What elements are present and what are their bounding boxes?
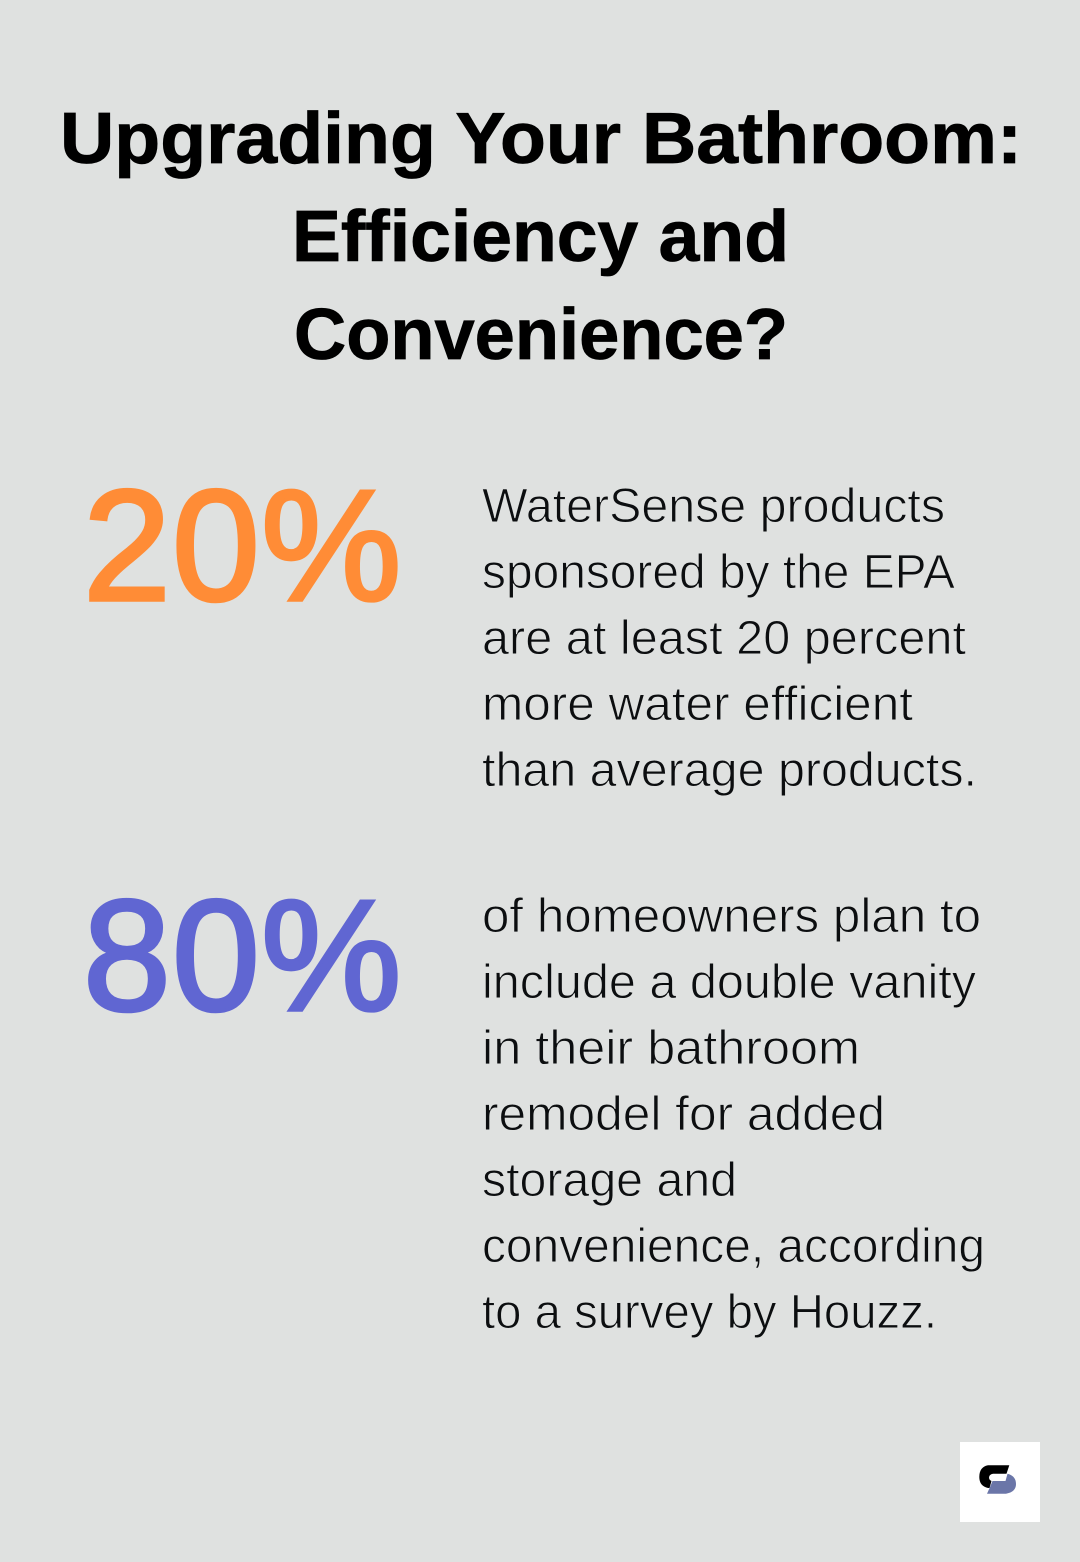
text block: homeowners double vanity: in their bathroom — [482, 1022, 860, 1075]
text block: WaterSense products — [482, 480, 977, 797]
text block: homeowners double vanity: remodel for added — [482, 1088, 885, 1141]
text block: homeowners double vanity: include a double vanity — [482, 956, 976, 1009]
text block: WaterSense products: than average products. — [482, 744, 977, 797]
text block: WaterSense products: sponsored by the EPA — [482, 546, 955, 599]
stat: 80%: 80% — [83, 868, 402, 1044]
title: Upgrading Your Bathroom: — [60, 99, 1022, 179]
title: Convenience? — [294, 295, 788, 375]
stat: 20%: 20% — [83, 458, 402, 634]
logo badge — [960, 1442, 1040, 1522]
text block: homeowners double vanity: to a survey by Houzz. — [482, 1286, 937, 1339]
text block: WaterSense products: are at least 20 percent — [482, 612, 966, 665]
text block: homeowners double vanity: of homeowners plan to — [482, 890, 981, 943]
title: Efficiency and — [292, 197, 789, 277]
text block: homeowners double vanity: storage and — [482, 1154, 737, 1207]
text block: homeowners double vanity: convenience, according — [482, 1220, 985, 1273]
text block: WaterSense products: WaterSense products — [482, 480, 945, 533]
text block: homeowners double vanity — [482, 890, 985, 1339]
title — [60, 99, 1022, 375]
text block: WaterSense products: more water efficient — [482, 678, 913, 731]
